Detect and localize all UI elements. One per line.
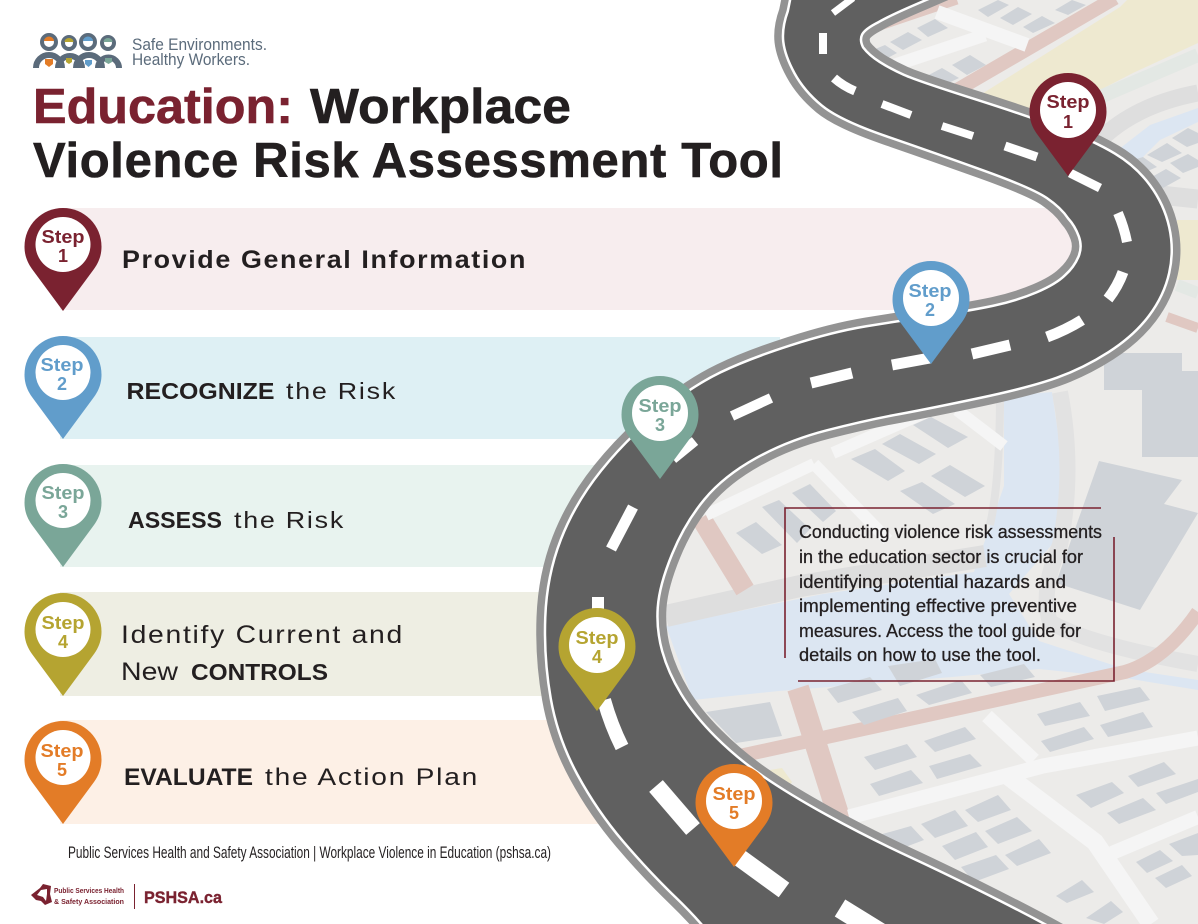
label: step 5	[124, 764, 479, 791]
title	[33, 80, 783, 188]
title: Education:	[33, 80, 293, 134]
callout: measures. Access the tool guide for	[799, 620, 1081, 641]
logo: PSHSA: & Safety Association	[54, 897, 124, 906]
label: step 1: Provide General Information	[122, 246, 527, 274]
callout: identifying potential hazards and	[799, 571, 1066, 592]
pin: road step 5	[696, 764, 772, 867]
city map background	[605, 0, 1198, 924]
pin: left step 3: Step	[42, 483, 84, 503]
label: step 4	[121, 621, 404, 686]
callout: Conducting violence risk assessments	[799, 521, 1102, 542]
pin: left step 4: Step	[42, 613, 84, 633]
pin: left step 5: Step	[40, 741, 84, 761]
band: step 4	[60, 592, 600, 696]
logo: PSHSA: PSHSA.ca	[144, 888, 223, 907]
band: step 2	[60, 337, 780, 439]
label: step 3	[128, 507, 345, 533]
pin: left step 2: 2	[57, 374, 67, 394]
label: step 4: CONTROLS	[191, 659, 328, 685]
pin: left step 3	[24, 464, 102, 567]
title: Violence Risk Assessment Tool	[33, 134, 783, 188]
pin: left step 4	[24, 593, 102, 696]
title: Workplace	[310, 80, 571, 134]
logo: PSHSA	[31, 884, 223, 909]
callout: in the education sector is crucial for	[799, 546, 1083, 567]
pin: left step 5	[24, 721, 102, 824]
label: step 3: the Risk	[234, 507, 345, 533]
pin: left step 2: Step	[40, 355, 84, 375]
footer source line: Public Services Health and Safety Association | Workplace Violence in Education (pshsa.ca)	[68, 843, 551, 862]
pin: road step 3: Step	[638, 396, 682, 416]
logo: Safe Environments. Healthy Workers.: Healthy Workers.	[132, 50, 250, 69]
pin: road step 2: Step	[908, 281, 952, 301]
pin: road step 3: 3	[655, 415, 665, 435]
pin: left step 3: 3	[58, 502, 68, 522]
callout: implementing effective preventive	[799, 595, 1077, 616]
pin: road step 1: Step	[1046, 92, 1090, 112]
pin: road step 5: Step	[712, 784, 756, 804]
pin: left step 1	[24, 208, 102, 311]
label: step 4: New	[121, 658, 179, 686]
pin: road step 4: 4	[592, 647, 602, 667]
label: step 5: EVALUATE	[124, 764, 253, 791]
pin: left step 5: 5	[57, 760, 67, 780]
callout: details on how to use the tool.	[799, 644, 1041, 665]
logo: Safe Environments. Healthy Workers.	[36, 35, 267, 69]
pin: road step 1: 1	[1063, 112, 1073, 132]
logo: PSHSA: Public Services Health	[54, 886, 124, 895]
callout	[785, 508, 1114, 681]
label: step 4: Identify Current and	[121, 621, 404, 649]
pin: road step 4	[558, 608, 636, 711]
pin: road step 3	[622, 376, 698, 479]
logo: Safe Environments. Healthy Workers.: Safe Environments.	[132, 35, 267, 54]
label: step 3: ASSESS	[128, 507, 222, 533]
pin: left step 4: 4	[58, 632, 68, 652]
band: step 3	[60, 465, 640, 567]
band: step 5	[60, 720, 620, 824]
label: step 2	[126, 378, 397, 404]
pin: road step 5: 5	[729, 803, 739, 823]
pin: road step 2	[892, 261, 970, 364]
pin: road step 4: Step	[576, 628, 618, 648]
label: step 2: RECOGNIZE	[126, 378, 274, 404]
pin: left step 1: Step	[42, 227, 84, 247]
label: step 2: the Risk	[286, 378, 397, 404]
winding road	[546, 0, 1170, 924]
pin: road step 1	[1030, 73, 1106, 176]
band: step 1	[60, 208, 1075, 310]
pin: left step 2	[24, 336, 102, 439]
label: step 5: the Action Plan	[265, 764, 479, 791]
pin: road step 2: 2	[925, 300, 935, 320]
pin: left step 1: 1	[58, 246, 68, 266]
